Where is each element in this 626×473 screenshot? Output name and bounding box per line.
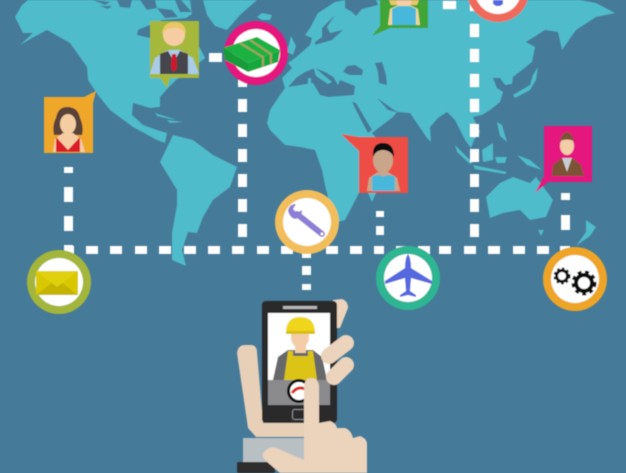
continent: North America (15, 0, 205, 143)
avatar: man with hat (535, 126, 592, 193)
icon: wrench (275, 190, 339, 254)
islands: Caribbean (155, 113, 183, 123)
home button (292, 410, 308, 420)
islands: Asia Pacific (368, 67, 542, 202)
phone speaker (283, 306, 317, 309)
arctic channels (93, 0, 192, 18)
icon: gears (543, 247, 607, 311)
icon: cash stack (223, 21, 288, 85)
left hand holding phone (237, 345, 305, 437)
shirt cuff (243, 438, 305, 462)
world map (15, 0, 615, 266)
continent: South America (160, 135, 237, 266)
hand and smartphone (237, 299, 367, 473)
dashed network lines (64, 0, 570, 290)
phone screen (268, 313, 330, 380)
avatar: woman (44, 91, 96, 153)
seas cut into the land (288, 0, 400, 133)
Italy and Mediterranean islands (308, 66, 340, 85)
construction worker (273, 317, 327, 380)
continent: Greenland and northern islands (203, 0, 296, 55)
fingers behind phone (333, 299, 348, 328)
icon: airplane (376, 246, 440, 310)
icon: top coral badge (467, 0, 529, 22)
gripping fingers (329, 343, 346, 377)
continent: Australia and New Zealand (486, 177, 596, 246)
smartphone body (262, 301, 337, 423)
avatar: green person (372, 0, 428, 36)
suit sleeve (237, 462, 275, 473)
right hand pointing (263, 378, 367, 473)
icon: envelope (27, 250, 91, 314)
call button (288, 380, 310, 402)
avatar: man in blue shirt (341, 134, 408, 193)
continent: Eurasia and Africa (267, 0, 615, 222)
avatar: manager (150, 21, 199, 88)
